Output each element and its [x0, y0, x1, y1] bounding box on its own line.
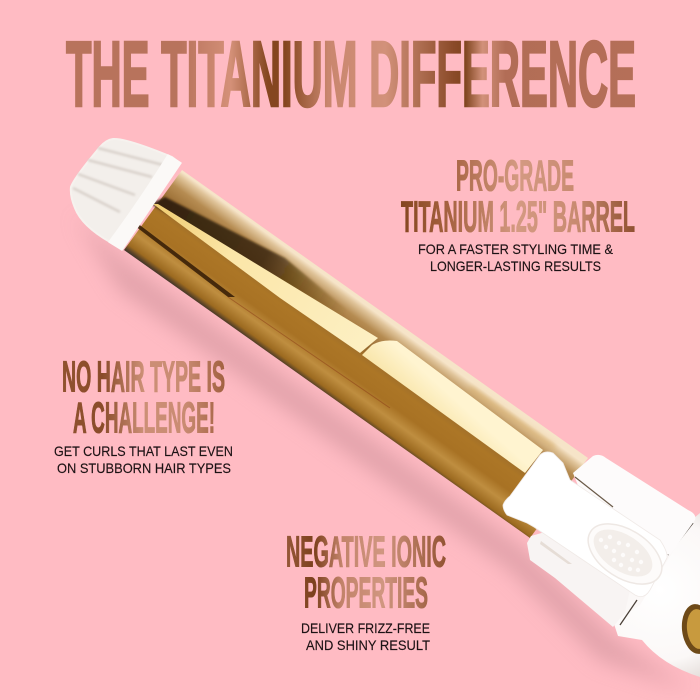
- callout body: [301, 620, 430, 653]
- cap collar: [109, 155, 181, 250]
- callout body: AND SHINY RESULT: [306, 637, 430, 653]
- barrel orange streak: [470, 388, 555, 447]
- callout body: [54, 443, 233, 476]
- barrel: [124, 170, 588, 538]
- clamp lever: [503, 452, 667, 597]
- callout: hair type: [54, 352, 233, 476]
- tip cap: [71, 139, 181, 250]
- lower plate window: [540, 541, 572, 564]
- callout body: LONGER-LASTING RESULTS: [430, 258, 601, 274]
- gold button: [679, 603, 700, 655]
- callout heading: PROPERTIES: [304, 568, 428, 618]
- rear clamp: [573, 455, 695, 555]
- callout heading: [401, 152, 635, 242]
- text: A CHALLENGE!: [73, 394, 215, 442]
- barrel lower dark line: [135, 223, 235, 297]
- callout body: DELIVER FRIZZ-FREE: [301, 620, 430, 636]
- barrel dark reflection: [151, 197, 345, 318]
- barrel bright highlight near tip: [153, 204, 378, 353]
- callout body: FOR A FASTER STYLING TIME &: [418, 241, 614, 257]
- barrel thin red line: [228, 297, 390, 408]
- callout heading: [286, 528, 446, 618]
- callout heading: [62, 352, 225, 442]
- text: NO HAIR TYPE IS: [62, 352, 225, 402]
- barrel bright highlight main: [362, 340, 543, 473]
- callout: barrel: [401, 152, 635, 274]
- lower plate: [527, 532, 630, 627]
- callout body: ON STUBBORN HAIR TYPES: [57, 460, 231, 476]
- handle body: [614, 513, 700, 677]
- clamp slot detail: [575, 477, 613, 507]
- curling iron product photo: [71, 139, 700, 690]
- callout body: GET CURLS THAT LAST EVEN: [54, 443, 233, 459]
- handle neck fill: [590, 535, 675, 622]
- thumb grip: [578, 512, 672, 596]
- callout body: [418, 241, 614, 274]
- callout: ionic: [286, 528, 446, 653]
- cap ribs: [73, 148, 163, 212]
- handle ring slits: [620, 523, 693, 625]
- drop shadow: [75, 215, 690, 690]
- text: NEGATIVE IONIC: [286, 528, 446, 576]
